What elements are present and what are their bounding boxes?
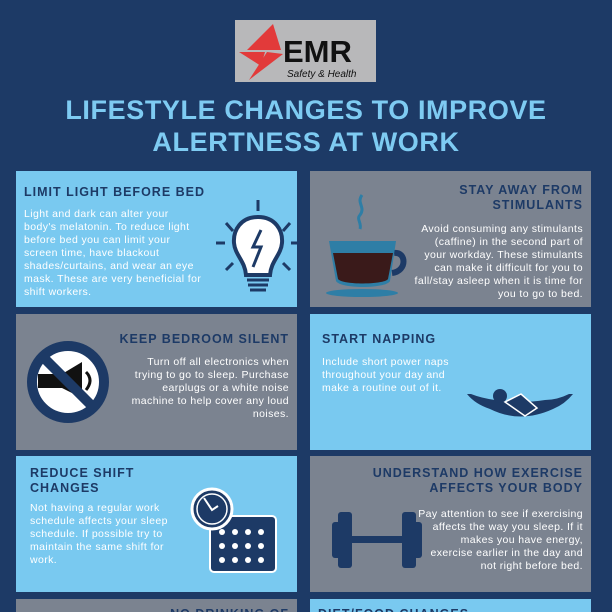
title [65,95,547,157]
panel: stimulants: Avoid consuming any stimulants (caffine) in the second part of your workday. These stimulants can make it difficult for you to fall/stay asleep when it is time for you to go to bed. [415,223,583,300]
panel: limit light: LIMIT LIGHT BEFORE BED [24,185,205,199]
panel: reduce shift changes [16,456,297,592]
panel: reduce shift changes: REDUCE SHIFT CHANGES [30,466,134,495]
panel: diet changes [310,599,591,612]
icon: no sound sign [27,341,109,423]
panel: stimulants [310,171,591,307]
icon: coffee cup [326,194,406,297]
title: LIFESTYLE CHANGES TO IMPROVE [65,95,547,125]
panel: reduce shift changes: Not having a regular work schedule affects your sleep schedule. If possible try to maintain the same shift for work. [30,502,168,566]
icon: clock and calendar [190,488,277,573]
panel: keep bedroom silent: KEEP BEDROOM SILENT [120,332,289,346]
panel: exercise [310,456,591,592]
panel: exercise: Pay attention to see if exercising affects the way you sleep. If it makes you have energy, exercise earlier in the day and not right before bed. [418,508,583,572]
panel: start napping: Include short power naps throughout your day and make a routine out of it. [322,356,449,394]
title: ALERTNESS AT WORK [152,127,460,157]
icon: light bulb [216,200,297,292]
icon: hammock [467,389,573,417]
panel: no drinking [16,599,297,612]
panel: stimulants: STAY AWAY FROM STIMULANTS [459,183,583,212]
logo text: Safety & Health [287,69,357,80]
icon: red logo mark [239,24,283,80]
panel: exercise: UNDERSTAND HOW EXERCISE AFFECTS YOUR BODY [373,466,583,495]
panel: keep bedroom silent: Turn off all electronics when trying to go to sleep. Purchase earplugs or a white noise machine to help cover any loud noises. [132,356,289,420]
panel: limit light: Light and dark can alter your body's melatonin. To reduce light before bed you can limit your screen time, have blackout shades/curtains, and wear an eye mask. These are very beneficial for shift workers. [24,208,201,298]
panel: start napping [310,314,591,450]
logo text: EMR [283,34,352,69]
panel: keep bedroom silent [16,314,297,450]
panel: start napping: START NAPPING [322,332,436,346]
panel: limit light [16,171,297,307]
icon: dumbbell [332,512,422,568]
logo [235,20,376,82]
